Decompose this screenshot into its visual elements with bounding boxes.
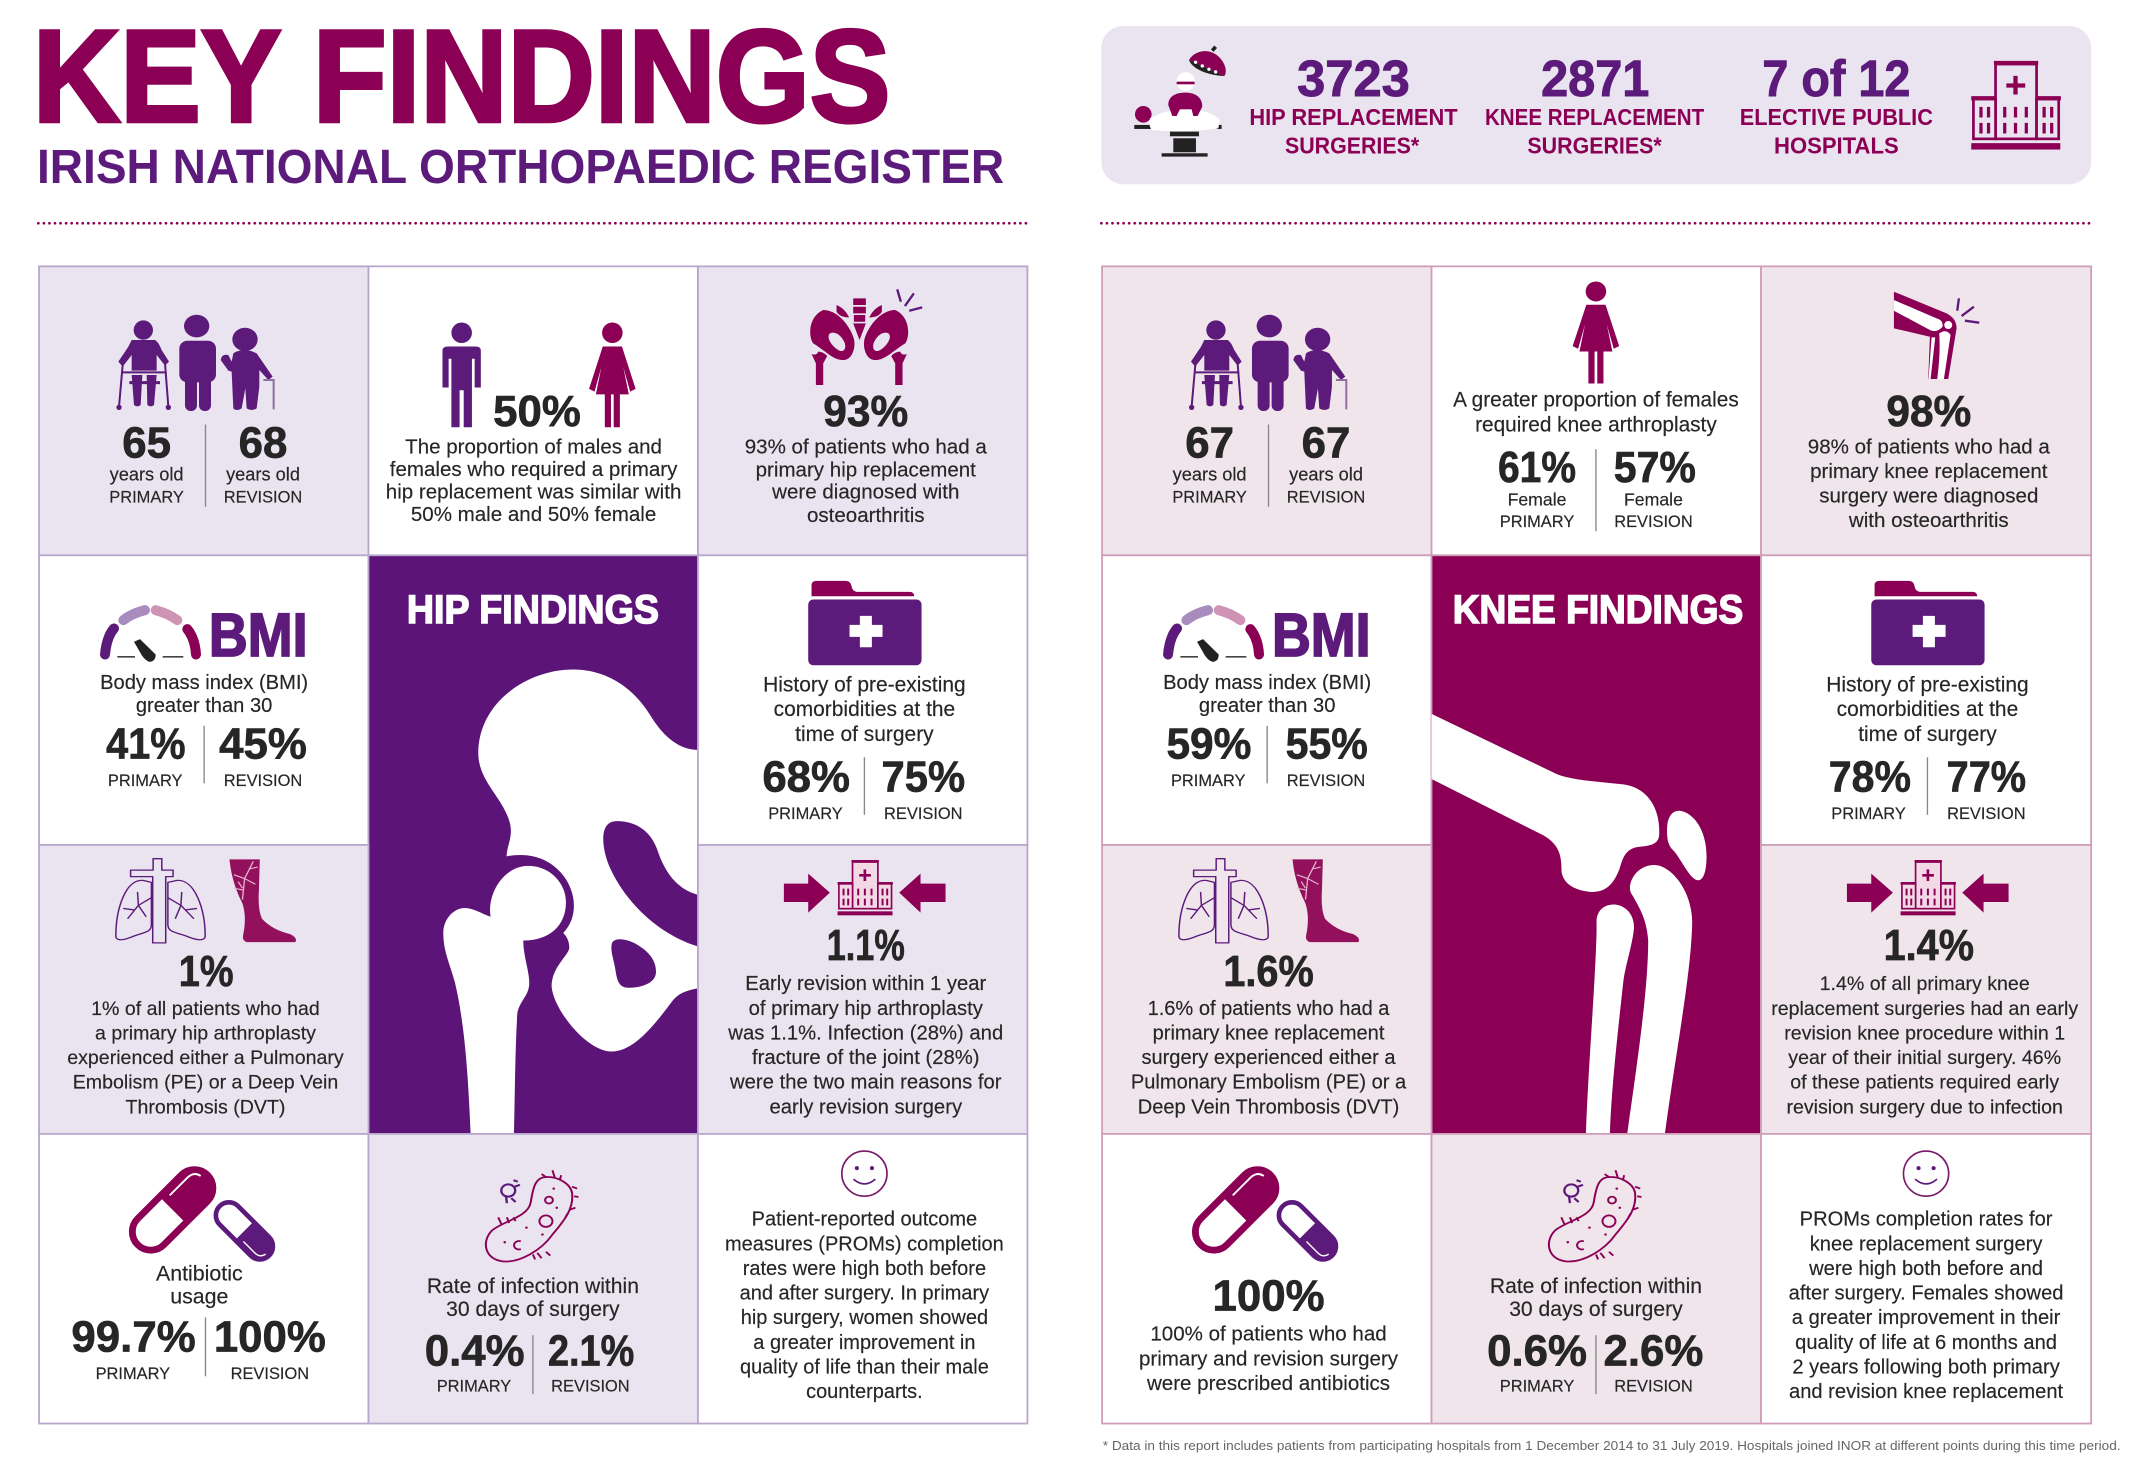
infection numbers: 0.6% bbox=[1487, 1326, 1587, 1375]
text: PROMs: a greater improvement in their bbox=[1792, 1307, 2061, 1329]
cell: hip PROMs bbox=[698, 1134, 1027, 1424]
BMI numbers: 45% bbox=[219, 720, 307, 769]
comorbidity numbers: 68% bbox=[762, 753, 850, 802]
BMI numbers bbox=[1166, 720, 1368, 790]
text: PE and DVT: experienced either a Pulmonary bbox=[67, 1047, 344, 1069]
age numbers: REVISION bbox=[224, 489, 302, 507]
icon: leg with veins bbox=[1292, 859, 1359, 942]
stat: knee replacement surgeries: SURGERIES* bbox=[1527, 133, 1663, 159]
text: PE and DVT: surgery experienced either a bbox=[1141, 1047, 1396, 1069]
comorbidity numbers: 77% bbox=[1947, 753, 2026, 802]
icon: pills bbox=[123, 1158, 281, 1268]
age numbers: years old bbox=[226, 465, 300, 485]
panel: hip findings grid bbox=[39, 266, 1027, 1424]
BMI numbers: 41% bbox=[106, 720, 186, 769]
statistic 50%: 50% bbox=[493, 387, 581, 436]
icon: knee joint bbox=[1894, 292, 1979, 379]
panel: knee findings grid bbox=[1102, 266, 2091, 1424]
statistic 1.4%: 1.4% bbox=[1884, 921, 1974, 970]
cell: knee infection bbox=[1432, 1134, 1761, 1424]
infection numbers: PRIMARY bbox=[437, 1377, 511, 1395]
stat: hip replacement surgeries: SURGERIES* bbox=[1285, 133, 1420, 159]
BMI numbers: 55% bbox=[1286, 720, 1368, 769]
antibiotic numbers: 99.7% bbox=[71, 1313, 196, 1362]
text: comorbidities: comorbidities at the bbox=[774, 698, 955, 721]
gender numbers: PRIMARY bbox=[1500, 513, 1574, 531]
icon: BMI gauge bbox=[105, 610, 196, 662]
text: osteoarthritis: primary knee replacement bbox=[1810, 460, 2048, 483]
text: PE and DVT: 1% of all patients who had bbox=[91, 998, 320, 1020]
text: PROMs: and revision knee replacement bbox=[1789, 1381, 2064, 1403]
text: osteoarthritis: surgery were diagnosed bbox=[1819, 485, 2038, 508]
BMI numbers: REVISION bbox=[224, 772, 302, 790]
comorbidity numbers: REVISION bbox=[1947, 805, 2026, 823]
BMI label: BMI bbox=[1272, 601, 1371, 670]
age numbers: years old bbox=[110, 465, 184, 485]
text: PE and DVT: Embolism (PE) or a Deep Vein bbox=[73, 1072, 338, 1094]
icon: pills bbox=[1186, 1158, 1344, 1268]
infection numbers bbox=[1487, 1326, 1703, 1395]
text: infection rate: 30 days of surgery bbox=[1509, 1298, 1683, 1321]
text: osteoarthritis: were diagnosed with bbox=[771, 480, 959, 503]
text: PROMs: hip surgery, women showed bbox=[741, 1307, 988, 1329]
age numbers bbox=[109, 418, 302, 507]
icon: female bbox=[1573, 281, 1619, 383]
BMI numbers bbox=[106, 720, 307, 790]
age numbers: REVISION bbox=[1287, 489, 1365, 507]
cell: hip comorbidities bbox=[698, 555, 1027, 845]
cell: knee BMI bbox=[1102, 555, 1432, 845]
gender numbers: Female bbox=[1624, 489, 1683, 509]
age numbers: years old bbox=[1173, 465, 1247, 485]
comorbidity numbers: 75% bbox=[882, 753, 965, 802]
comorbidity numbers bbox=[1829, 753, 2026, 823]
text: gender proportion: females who required a primary bbox=[390, 458, 678, 481]
infection numbers: PRIMARY bbox=[1500, 1377, 1574, 1395]
text: PE and DVT: 1.6% of patients who had a bbox=[1148, 998, 1390, 1020]
text: comorbidities: History of pre-existing bbox=[1826, 674, 2029, 697]
text: comorbidities: time of surgery bbox=[795, 723, 934, 746]
title: KEY FINDINGS bbox=[33, 2, 890, 149]
cell: hip BMI bbox=[39, 555, 369, 845]
summary stats panel bbox=[1101, 26, 2091, 184]
text: PROMs: quality of life than their male bbox=[740, 1357, 989, 1379]
illustration: hip bones bbox=[443, 670, 697, 1134]
text: early revision: replacement surgeries had an early bbox=[1771, 998, 2078, 1020]
infection numbers bbox=[425, 1326, 634, 1395]
icon: medical folder bbox=[808, 581, 922, 665]
icon: elderly people bbox=[116, 315, 274, 411]
text: PROMs: after surgery. Females showed bbox=[1789, 1283, 2063, 1305]
cell: hip early revision bbox=[698, 845, 1027, 1134]
cell: knee PE and DVT bbox=[1102, 845, 1432, 1134]
text: early revision: was 1.1%. Infection (28%) and bbox=[727, 1022, 1003, 1044]
text: gender proportion: hip replacement was similar with bbox=[386, 480, 681, 503]
icon: lungs bbox=[1179, 859, 1268, 943]
text: antibiotics: were prescribed antibiotics bbox=[1146, 1372, 1390, 1395]
cell: hip age bbox=[39, 266, 369, 555]
statistic 1%: 1% bbox=[179, 947, 234, 996]
text: osteoarthritis: osteoarthritis bbox=[807, 504, 925, 527]
text: PROMs: 2 years following both primary bbox=[1792, 1357, 2061, 1379]
icon: hospital building bbox=[1971, 61, 2061, 150]
text: PROMs: PROMs completion rates for bbox=[1800, 1209, 2053, 1231]
cell: hip antibiotics bbox=[39, 1134, 369, 1424]
text: early revision: of these patients required early bbox=[1790, 1072, 2059, 1094]
cell: hip osteoarthritis bbox=[698, 266, 1027, 555]
infection numbers: 2.1% bbox=[548, 1326, 634, 1375]
text: PROMs: rates were high both before bbox=[743, 1258, 986, 1280]
BMI label: BMI bbox=[209, 601, 308, 670]
text: early revision: 1.4% of all primary knee bbox=[1820, 973, 2030, 995]
text: gender proportion: 50% male and 50% female bbox=[411, 503, 656, 526]
text: gender proportion: The proportion of males and bbox=[405, 435, 662, 458]
stat: elective public hospitals bbox=[1740, 50, 1933, 159]
text: PROMs: were high both before and bbox=[1808, 1258, 2043, 1280]
antibiotic numbers: REVISION bbox=[231, 1365, 309, 1383]
gender numbers: REVISION bbox=[1614, 513, 1693, 531]
cell: knee antibiotics bbox=[1102, 1134, 1432, 1424]
stat: elective public hospitals: HOSPITALS bbox=[1774, 133, 1899, 159]
statistic 1.6%: 1.6% bbox=[1223, 947, 1314, 996]
text: BMI description: greater than 30 bbox=[1199, 695, 1335, 717]
text: early revision: revision knee procedure within 1 bbox=[1784, 1022, 2065, 1044]
cell: knee age bbox=[1102, 266, 1432, 555]
infection numbers: REVISION bbox=[1614, 1377, 1693, 1395]
statistic 1.1%: 1.1% bbox=[827, 921, 905, 970]
text: comorbidities: History of pre-existing bbox=[763, 674, 966, 697]
icon: male bbox=[442, 323, 481, 427]
age numbers bbox=[1172, 418, 1365, 507]
statistic 100%: 100% bbox=[1212, 1272, 1325, 1321]
text: PE and DVT: a primary hip arthroplasty bbox=[95, 1022, 316, 1044]
BMI numbers: 59% bbox=[1166, 720, 1251, 769]
text: comorbidities: time of surgery bbox=[1858, 723, 1997, 746]
heading: knee findings: KNEE FINDINGS bbox=[1453, 588, 1743, 632]
panel: hip findings title block bbox=[369, 555, 698, 1134]
comorbidity numbers: REVISION bbox=[884, 805, 963, 823]
text: knee gender: A greater proportion of females bbox=[1453, 389, 1739, 412]
stat: knee replacement surgeries bbox=[1485, 50, 1704, 159]
stat: elective public hospitals: 7 of 12 bbox=[1762, 50, 1910, 107]
gender numbers: 61% bbox=[1498, 443, 1576, 492]
icon: arrows to hospital bbox=[1847, 860, 2009, 915]
age numbers: PRIMARY bbox=[1172, 489, 1247, 507]
illustration: knee bones bbox=[1432, 714, 1707, 1134]
cell: knee gender bbox=[1432, 266, 1761, 555]
text: BMI description: Body mass index (BMI) bbox=[100, 672, 308, 694]
icon: lungs bbox=[116, 859, 205, 943]
cell: hip gender bbox=[369, 266, 698, 555]
text: BMI description: Body mass index (BMI) bbox=[1163, 672, 1371, 694]
text: early revision: of primary hip arthroplasty bbox=[749, 998, 984, 1020]
text: antibiotics: 100% of patients who had bbox=[1150, 1323, 1387, 1346]
comorbidity numbers: PRIMARY bbox=[768, 805, 843, 823]
text: BMI description: greater than 30 bbox=[136, 695, 272, 717]
text: early revision: early revision surgery bbox=[769, 1096, 963, 1118]
antibiotic numbers: 100% bbox=[214, 1313, 326, 1362]
text: PROMs: and after surgery. In primary bbox=[740, 1283, 989, 1305]
icon: pelvis bbox=[810, 289, 922, 385]
text: osteoarthritis: with osteoarthritis bbox=[1848, 509, 2009, 532]
icon: arrows to hospital bbox=[784, 860, 946, 915]
text: early revision: were the two main reasons for bbox=[729, 1072, 1002, 1094]
text: PE and DVT: Thrombosis (DVT) bbox=[126, 1096, 285, 1118]
cell: hip infection bbox=[369, 1134, 698, 1424]
text: PROMs: knee replacement surgery bbox=[1810, 1233, 2043, 1255]
text: PE and DVT: primary knee replacement bbox=[1153, 1022, 1385, 1044]
text: infection rate: Rate of infection within bbox=[1490, 1275, 1702, 1298]
statistic 93%: 93% bbox=[823, 387, 908, 436]
text: early revision: fracture of the joint (28%) bbox=[752, 1047, 980, 1069]
icon: leg with veins bbox=[229, 859, 296, 942]
text: PE and DVT: Deep Vein Thrombosis (DVT) bbox=[1138, 1096, 1399, 1118]
gender numbers: Female bbox=[1508, 489, 1567, 509]
text: PROMs: Patient-reported outcome bbox=[752, 1209, 977, 1231]
comorbidity numbers: PRIMARY bbox=[1831, 805, 1906, 823]
text: knee gender: required knee arthroplasty bbox=[1475, 413, 1717, 436]
infection numbers: 2.6% bbox=[1604, 1326, 1703, 1375]
text: early revision: revision surgery due to infection bbox=[1786, 1096, 2063, 1118]
antibiotic numbers bbox=[71, 1313, 326, 1383]
age numbers: 65 bbox=[122, 418, 171, 467]
text: osteoarthritis: primary hip replacement bbox=[756, 459, 976, 482]
stat: hip replacement surgeries bbox=[1249, 50, 1458, 159]
age numbers: years old bbox=[1289, 465, 1363, 485]
text: comorbidities: comorbidities at the bbox=[1837, 698, 2018, 721]
gender numbers bbox=[1498, 443, 1696, 531]
text: osteoarthritis: 93% of patients who had a bbox=[745, 435, 987, 458]
antibiotic numbers: PRIMARY bbox=[96, 1365, 170, 1383]
text: PROMs: measures (PROMs) completion bbox=[725, 1233, 1004, 1255]
icon: smiley bbox=[1903, 1151, 1949, 1196]
text: PROMs: quality of life at 6 months and bbox=[1795, 1332, 2057, 1354]
age numbers: 67 bbox=[1302, 418, 1350, 467]
text: antibiotic usage: usage bbox=[170, 1285, 228, 1309]
text: PE and DVT: Pulmonary Embolism (PE) or a bbox=[1131, 1072, 1407, 1094]
statistic 98%: 98% bbox=[1886, 387, 1971, 436]
text: early revision: year of their initial surgery. 46% bbox=[1788, 1047, 2061, 1069]
icon: medical folder bbox=[1871, 581, 1985, 665]
panel: knee findings title block bbox=[1432, 555, 1761, 1134]
stat: hip replacement surgeries: 3723 bbox=[1297, 50, 1410, 107]
stat: elective public hospitals: ELECTIVE PUBLIC bbox=[1740, 104, 1933, 130]
cell: knee osteoarthritis bbox=[1761, 266, 2091, 555]
BMI numbers: PRIMARY bbox=[108, 772, 183, 790]
stat: hip replacement surgeries: HIP REPLACEMENT bbox=[1249, 104, 1458, 130]
comorbidity numbers bbox=[762, 753, 965, 823]
stat: knee replacement surgeries: KNEE REPLACEMENT bbox=[1485, 104, 1704, 130]
text: infection rate: Rate of infection within bbox=[427, 1275, 639, 1298]
age numbers: 67 bbox=[1185, 418, 1234, 467]
age numbers: 68 bbox=[239, 418, 287, 467]
infection numbers: 0.4% bbox=[425, 1326, 525, 1375]
icon: female bbox=[589, 323, 636, 427]
gender numbers: 57% bbox=[1614, 443, 1696, 492]
age numbers: PRIMARY bbox=[109, 489, 184, 507]
infection numbers: REVISION bbox=[551, 1377, 630, 1395]
cell: knee PROMs bbox=[1761, 1134, 2091, 1424]
subtitle: IRISH NATIONAL ORTHOPAEDIC REGISTER bbox=[37, 141, 1004, 194]
BMI numbers: PRIMARY bbox=[1171, 772, 1246, 790]
cell: hip PE and DVT bbox=[39, 845, 369, 1134]
cell: knee comorbidities bbox=[1761, 555, 2091, 845]
heading: hip findings: HIP FINDINGS bbox=[407, 588, 659, 632]
comorbidity numbers: 78% bbox=[1829, 753, 1911, 802]
text: antibiotic usage: Antibiotic bbox=[156, 1261, 243, 1285]
BMI numbers: REVISION bbox=[1287, 772, 1365, 790]
icon: bacteria bbox=[486, 1170, 578, 1262]
text: antibiotics: primary and revision surgery bbox=[1139, 1347, 1399, 1370]
icon: bacteria bbox=[1549, 1170, 1642, 1262]
footnote: * Data in this report includes patients from participating hospitals from 1 December 2014 to 31 July 2019. Hospitals joined INOR at different points during this time period. bbox=[1103, 1438, 2121, 1453]
text: early revision: Early revision within 1 year bbox=[745, 973, 987, 995]
icon: BMI gauge bbox=[1168, 610, 1259, 662]
icon: smiley bbox=[842, 1151, 887, 1196]
icon: elderly people bbox=[1189, 315, 1346, 411]
cell: knee early revision bbox=[1761, 845, 2091, 1134]
text: infection rate: 30 days of surgery bbox=[446, 1298, 620, 1321]
text: PROMs: a greater improvement in bbox=[753, 1332, 976, 1354]
text: PROMs: counterparts. bbox=[806, 1381, 923, 1403]
text: osteoarthritis: 98% of patients who had a bbox=[1808, 435, 2050, 458]
icon: surgeon at operating table bbox=[1134, 47, 1226, 157]
stat: knee replacement surgeries: 2871 bbox=[1541, 50, 1649, 107]
